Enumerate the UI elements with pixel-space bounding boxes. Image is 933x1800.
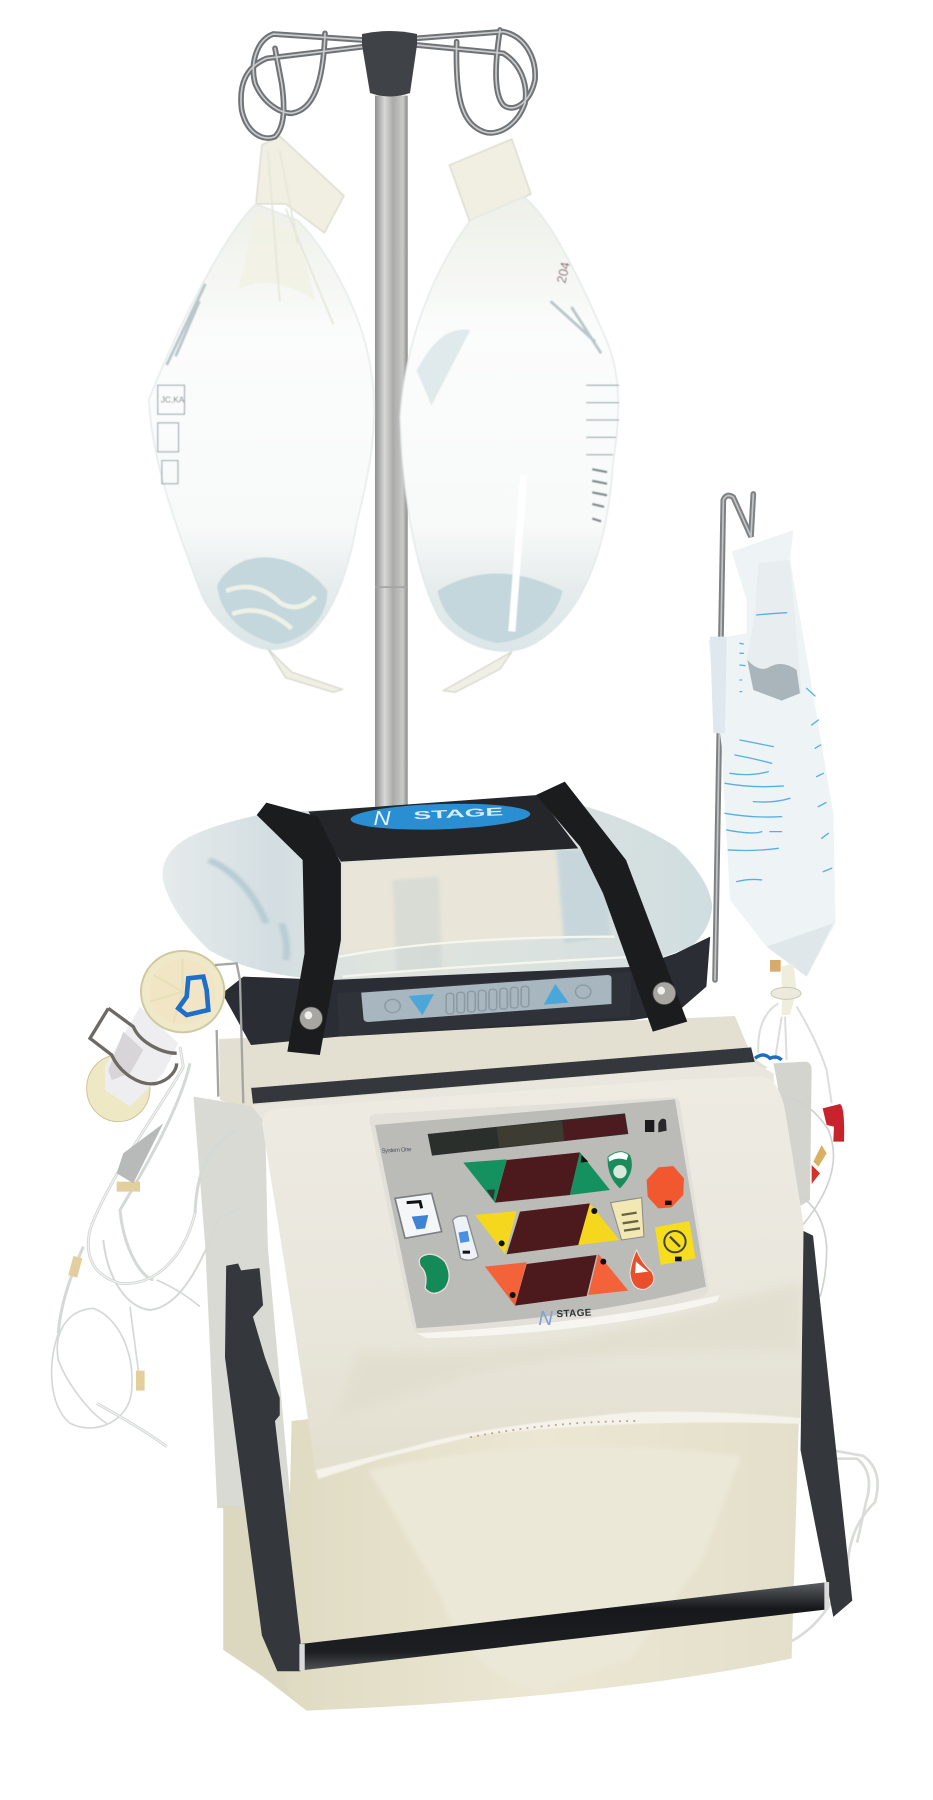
port and collar bbox=[770, 960, 801, 1015]
icon: yellow warning button bbox=[655, 1221, 696, 1265]
right hanging bag bbox=[400, 139, 619, 692]
green row bbox=[463, 1152, 610, 1203]
blue connectors bbox=[755, 1055, 782, 1060]
dark handle right arm bbox=[801, 1231, 852, 1617]
tube bundle bbox=[52, 1047, 240, 1447]
blue logo badge: N bbox=[373, 806, 392, 830]
icon: shield button bbox=[608, 1151, 632, 1188]
wire bracket bbox=[90, 1008, 177, 1084]
tube connectors bbox=[68, 1182, 145, 1391]
cartridge bottom disc bbox=[87, 1055, 150, 1122]
dark carry handle left arm bbox=[225, 1263, 301, 1671]
left tubing and blood filter bbox=[52, 951, 243, 1447]
lower side body bbox=[223, 1505, 307, 1711]
icon: fluid bottle button bbox=[453, 1216, 478, 1260]
left bag label print: JC,KA bbox=[161, 396, 185, 405]
upper cream block bbox=[219, 1016, 768, 1109]
pole hub bbox=[362, 31, 417, 96]
small lock icons bbox=[645, 1119, 667, 1132]
cartridge cylinder bbox=[105, 1007, 178, 1107]
blue logo badge bbox=[350, 801, 531, 832]
scale control strip bbox=[337, 972, 632, 1037]
left bag label print bbox=[158, 284, 205, 484]
display window bbox=[428, 1113, 628, 1156]
blue clip bbox=[178, 977, 208, 1015]
panel logo bbox=[538, 1307, 592, 1330]
icon: stop octagon bbox=[647, 1166, 684, 1208]
blue logo badge: STAGE bbox=[413, 805, 504, 822]
lower body facet bbox=[369, 1447, 741, 1690]
system one label: System One bbox=[381, 1147, 412, 1155]
transparent tube loops bbox=[778, 1095, 833, 1297]
tube highlights bbox=[88, 1047, 195, 1447]
small side bag bbox=[708, 530, 836, 977]
upper cream strip under slot bbox=[251, 1062, 774, 1123]
icon: kidney button bbox=[419, 1254, 449, 1293]
scale wire frame bbox=[215, 963, 243, 1103]
control panel bbox=[369, 1097, 720, 1338]
panel logo: N bbox=[538, 1308, 553, 1330]
left hanging bag bbox=[149, 136, 374, 692]
side bracket plates bbox=[193, 1097, 292, 1514]
red clamp bbox=[823, 1104, 844, 1142]
right bag label print bbox=[551, 261, 619, 521]
small side IV hook pole bbox=[715, 494, 753, 980]
panel logo: STAGE bbox=[556, 1307, 592, 1320]
right tubing and side plate bbox=[755, 960, 844, 1297]
icon: blood drop button bbox=[630, 1250, 654, 1289]
strap rivets bbox=[300, 982, 676, 1030]
machine upper shell bbox=[262, 1076, 804, 1470]
machine lower body bbox=[286, 1363, 801, 1711]
cartridge label bbox=[108, 1032, 143, 1080]
lower right tubes bbox=[792, 1450, 878, 1641]
shell shoulder shading bbox=[333, 1282, 801, 1421]
scale and solution bag bbox=[163, 782, 712, 1055]
yellow row bbox=[475, 1203, 619, 1254]
right bag label print: 204 bbox=[554, 261, 573, 284]
orange row bbox=[485, 1254, 628, 1306]
scale base bbox=[222, 937, 710, 1045]
IV pole bbox=[375, 96, 408, 843]
carry straps bbox=[257, 782, 687, 1055]
flat solution bag bbox=[163, 797, 712, 980]
vent dots bbox=[470, 1421, 640, 1437]
IV hooks bbox=[241, 30, 535, 138]
icon: cup button bbox=[611, 1198, 644, 1240]
dark slot above shell bbox=[251, 1047, 755, 1104]
handle bar bbox=[301, 1582, 829, 1670]
panel face bbox=[369, 1097, 709, 1335]
tubing drops bbox=[758, 1003, 832, 1103]
icon: water source button bbox=[395, 1193, 442, 1238]
cartridge top disc bbox=[141, 951, 224, 1032]
red connector bbox=[812, 1145, 827, 1184]
printed tag bbox=[117, 1123, 163, 1183]
